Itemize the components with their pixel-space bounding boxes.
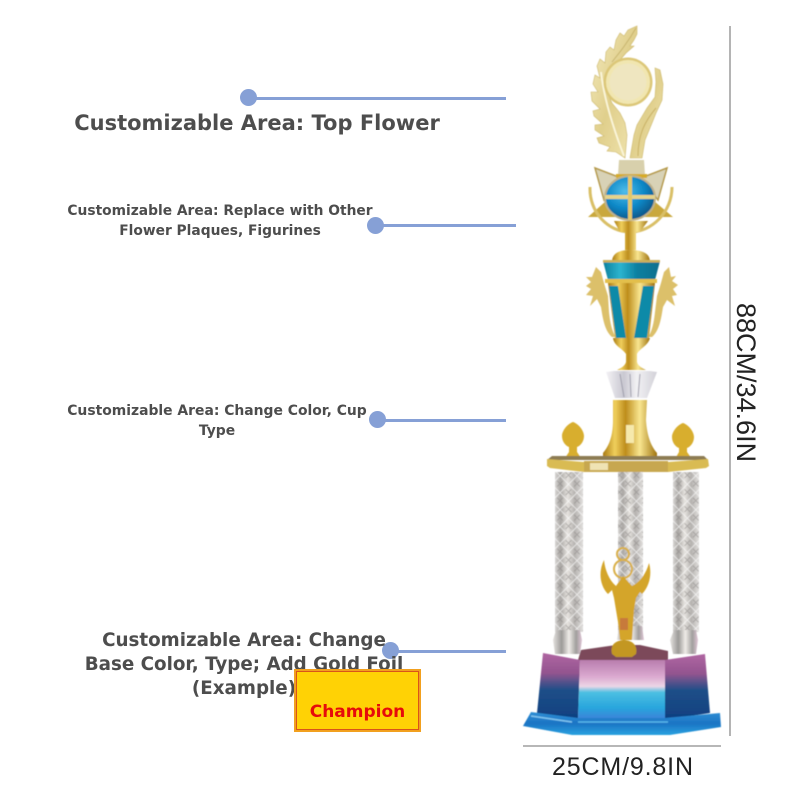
- callout line 3: [378, 419, 506, 422]
- callout dot 1: [240, 89, 257, 106]
- columns: [553, 472, 699, 654]
- plaque text: Champion: [310, 702, 405, 722]
- cup wings: [586, 267, 678, 337]
- gold foil plaque example: [294, 669, 421, 732]
- base: [523, 645, 721, 735]
- callout line 1: [248, 97, 506, 100]
- dimension: height label: 88CM/34.6IN: [731, 303, 761, 462]
- callout line 4: [390, 650, 506, 653]
- label: replace plaques: [67, 203, 373, 239]
- label: change base: Customizable Area: Change: [102, 630, 386, 651]
- callout dot 3: [369, 411, 386, 428]
- dimension: width label: 25CM/9.8IN: [552, 753, 694, 781]
- callout line 2: [375, 224, 516, 227]
- label: replace plaques: Customizable Area: Replace with Other: [67, 203, 373, 219]
- top plate: [547, 456, 709, 472]
- finials: [562, 422, 694, 459]
- label: change base: (Example): [192, 678, 296, 699]
- label: change cup: [67, 403, 367, 439]
- callout dot 2: [367, 217, 384, 234]
- gold bell stand: [603, 400, 657, 458]
- blue globe: [605, 176, 655, 220]
- cup body: [603, 260, 660, 370]
- top flower: [591, 26, 663, 158]
- label: change base: Base Color, Type; Add Gold Foil: [85, 654, 403, 675]
- label: replace plaques: Flower Plaques, Figurines: [119, 223, 321, 239]
- winged figurine: [601, 548, 650, 657]
- crystal collar: [606, 371, 657, 398]
- trophy: [523, 26, 721, 735]
- label: change base: [85, 630, 403, 699]
- dimension: width line: [523, 745, 721, 747]
- dimension: height line: [729, 26, 731, 736]
- holder stem: [612, 221, 650, 262]
- label: change cup: Type: [199, 423, 235, 439]
- label: top flower: Customizable Area: Top Flower: [74, 111, 440, 135]
- star and arc holder: [588, 160, 673, 232]
- callout dot 4: [382, 642, 399, 659]
- label: change cup: Customizable Area: Change Color, Cup: [67, 403, 367, 419]
